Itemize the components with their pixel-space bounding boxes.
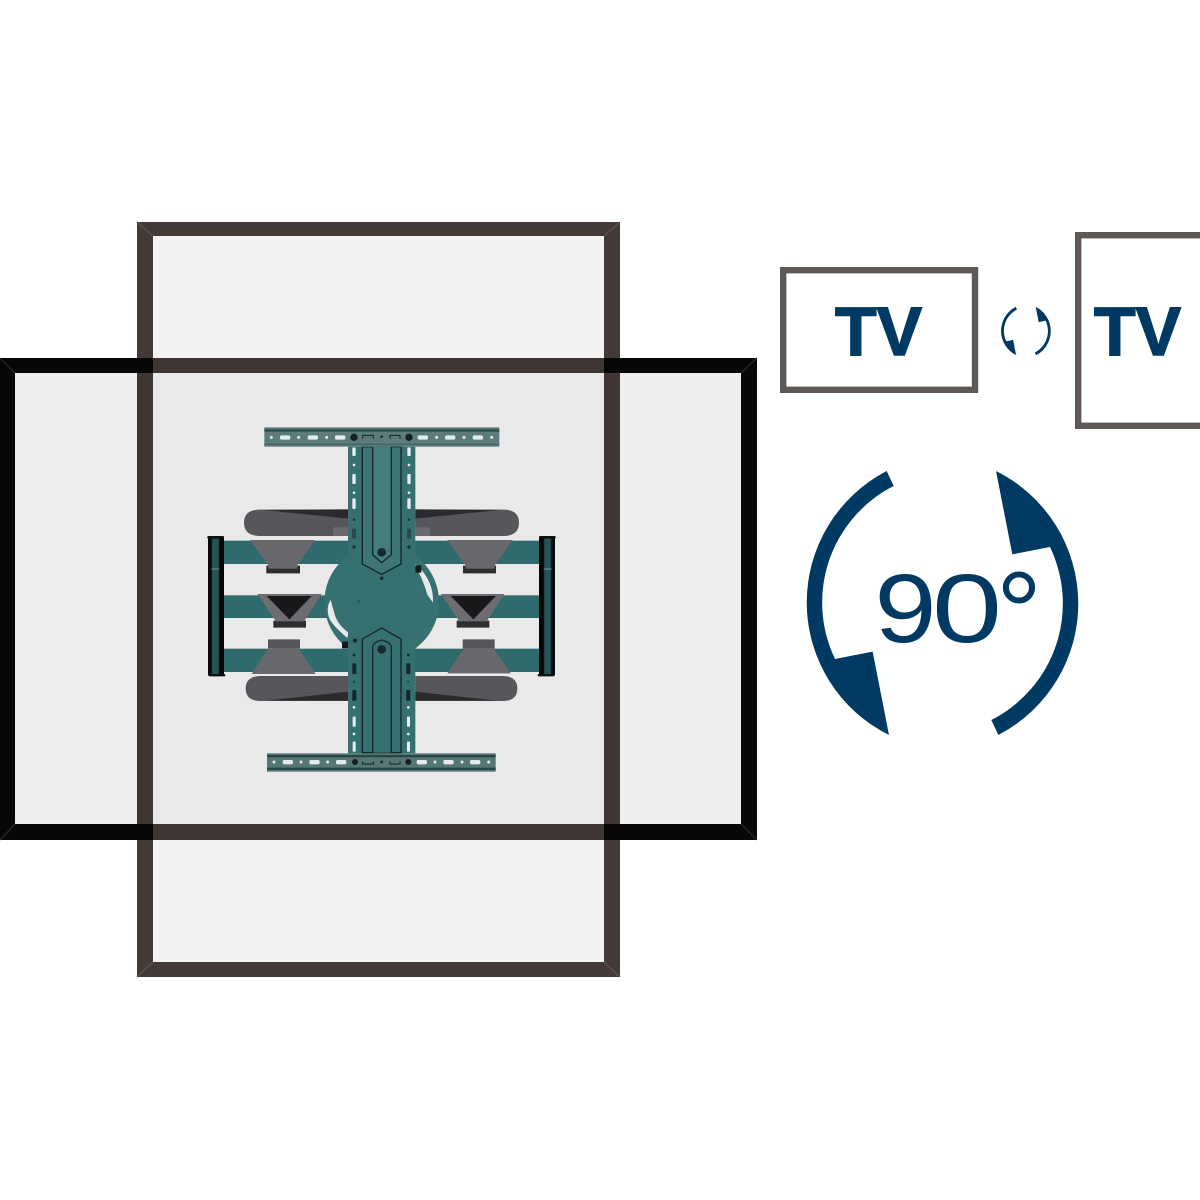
frame overlap: bottom edge (153, 824, 604, 840)
left arm bars (218, 541, 350, 672)
right pivot post (538, 536, 556, 676)
icon: small rotation arrows (1001, 307, 1051, 355)
left column of slots (352, 447, 356, 549)
lower left slots (352, 639, 357, 752)
bottom VESA rail (267, 753, 496, 772)
clamp row 3 right (447, 639, 511, 673)
clamp row 2 left (257, 594, 322, 628)
landscape TV screen glass (15, 373, 741, 824)
label: 90 degrees: 9 (874, 554, 936, 663)
rotation disc (324, 545, 439, 659)
wall mount bracket (207, 427, 556, 772)
upper grip arm left (244, 509, 348, 536)
left pivot post (207, 536, 225, 676)
portrait TV screen glass (153, 236, 604, 962)
upper grip arm right (415, 509, 519, 536)
label: 90 degrees: 0 (932, 554, 1002, 663)
right arm bars (413, 541, 543, 672)
lower grip arm right (415, 676, 517, 701)
landscape TV frame (0, 358, 757, 840)
lower right slots (406, 654, 410, 752)
frame overlap: top edge (153, 358, 604, 373)
icon: landscape TV (783, 270, 975, 390)
clamp row 1 right (447, 540, 513, 573)
top VESA rail (264, 427, 499, 447)
frame overlap: right edge (604, 373, 620, 824)
clamp row 3 left (252, 639, 316, 674)
lower grip arm left (246, 676, 348, 701)
clamp row 1 left (250, 540, 315, 573)
portrait TV frame (137, 222, 620, 977)
icon: landscape TV: TV (835, 293, 922, 370)
frame overlap: left edge (137, 373, 153, 824)
right column of slots (407, 447, 411, 549)
overlap of both screens (153, 373, 604, 824)
icon: portrait TV: TV (1094, 293, 1181, 370)
panel: TV screens in portrait and landscape orientation (0, 222, 757, 977)
label: 90 degrees: ° (996, 549, 1042, 677)
label: 90 degrees (874, 549, 1042, 677)
icon: 90 degree rotation arrows (807, 471, 1078, 735)
icon: portrait TV (1078, 235, 1200, 426)
vertical mounting plate (348, 447, 415, 753)
clamp row 2 right (441, 594, 504, 628)
